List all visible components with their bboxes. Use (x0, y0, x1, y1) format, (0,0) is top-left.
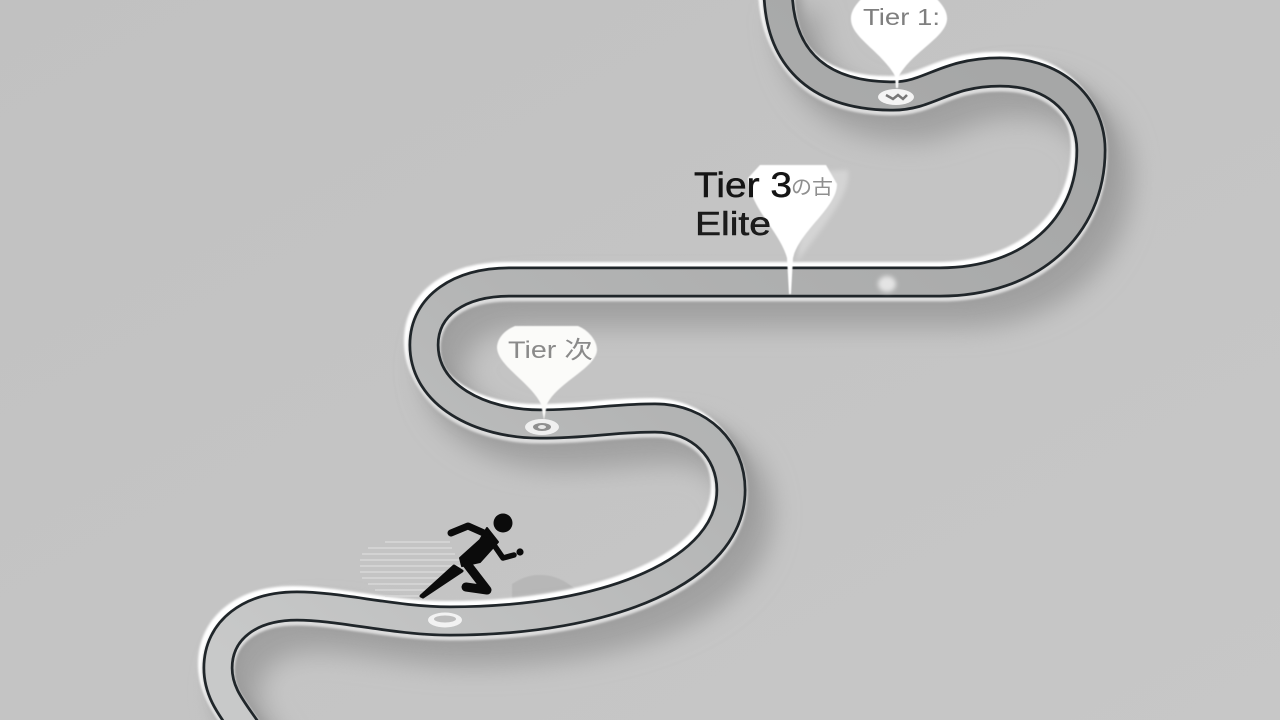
runner speed lines (360, 542, 462, 596)
heading: tier 3 elite (694, 166, 792, 242)
marker: tier 3 glow (878, 276, 896, 292)
marker: tier 2 ring (525, 419, 559, 435)
heading: tier 3 elite: Elite (695, 205, 771, 242)
marker: tier 1 ring (878, 89, 914, 105)
heading: tier 3 elite: Tier 3 (694, 166, 792, 205)
pin: tier 2 (497, 326, 597, 420)
runner motion shadow (512, 575, 580, 606)
pin label: tier 1: Tier 1: (863, 4, 940, 30)
road shadow (238, 12, 1111, 720)
pin: tier 1 (851, 0, 947, 88)
pin label: tier 2: Tier 次 (508, 337, 593, 364)
icon: runner (421, 514, 524, 597)
road lower edge (218, 0, 1091, 720)
road sheen (560, 280, 880, 290)
pin shadow: tier 3 (797, 170, 848, 262)
pin label: tier 3 faint: の古 (791, 176, 833, 199)
road near shadow (225, 0, 1098, 720)
pin: tier 3 (748, 165, 837, 294)
road glow edge (214, 0, 1087, 720)
marker: start ring (428, 612, 462, 628)
winding road (218, 0, 1091, 720)
